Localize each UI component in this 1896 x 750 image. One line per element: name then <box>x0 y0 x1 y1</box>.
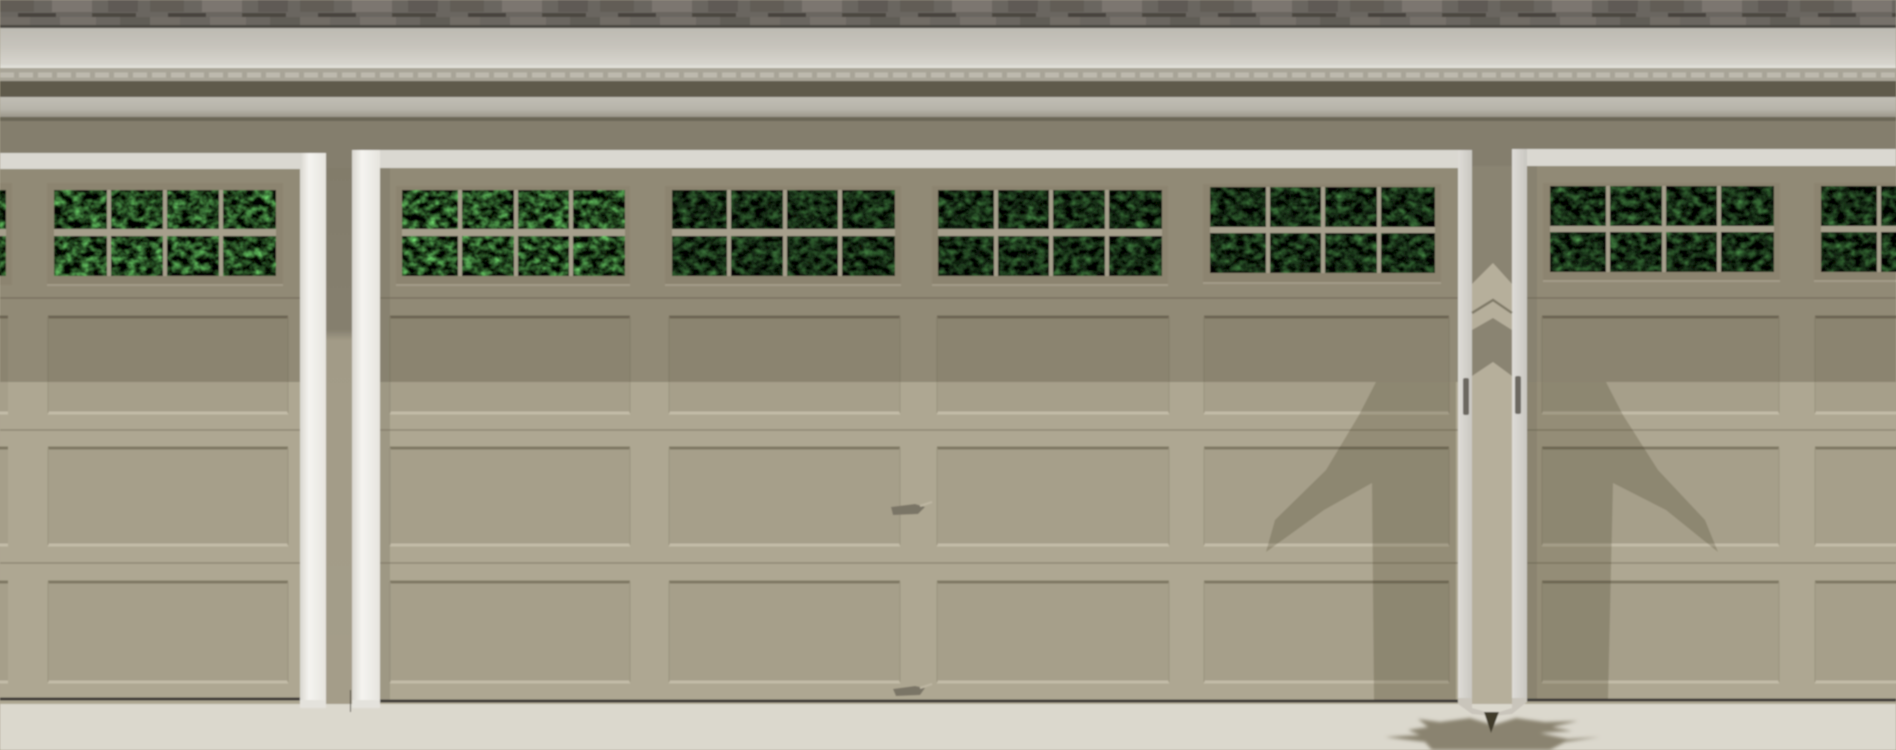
concrete driveway <box>0 704 1896 750</box>
centre post base <box>1458 698 1527 716</box>
wall strip between left and centre door <box>326 168 352 707</box>
wall strip corner shadow <box>350 690 352 712</box>
hinge left <box>1463 378 1469 415</box>
right door base <box>1527 166 1896 703</box>
splatter shadow on driveway <box>1385 718 1600 750</box>
spike at post base <box>1484 712 1499 733</box>
window glass with foliage <box>0 186 1896 276</box>
background door field <box>0 117 1896 707</box>
window inset frames <box>0 183 1896 285</box>
left door trim <box>0 153 326 707</box>
door latch lower <box>893 684 932 696</box>
dentil moulding <box>0 68 1896 81</box>
door section seams <box>0 298 1896 563</box>
cast figure shadow, left half <box>1266 382 1456 700</box>
wall header <box>0 117 1896 169</box>
left door panels and rails <box>0 168 300 703</box>
right door trim <box>1512 149 1896 702</box>
eave fascia board <box>0 28 1896 68</box>
centre post <box>1472 166 1512 712</box>
roof shingles <box>0 0 1896 28</box>
raised panels on all doors <box>0 317 1896 682</box>
cast figure shadow, right half <box>1527 382 1718 700</box>
lower trim band <box>0 97 1896 117</box>
bottom door seals <box>0 699 1896 701</box>
door latch upper <box>891 502 932 515</box>
hinge right <box>1515 376 1521 414</box>
dark soffit band <box>0 81 1896 97</box>
centre door trim <box>352 150 1472 707</box>
jamb feet <box>300 700 380 708</box>
overhead shadow across door tops <box>0 166 1896 382</box>
centre door base <box>380 168 1458 703</box>
door edge shading <box>380 166 1537 700</box>
window muntins <box>0 186 1896 276</box>
